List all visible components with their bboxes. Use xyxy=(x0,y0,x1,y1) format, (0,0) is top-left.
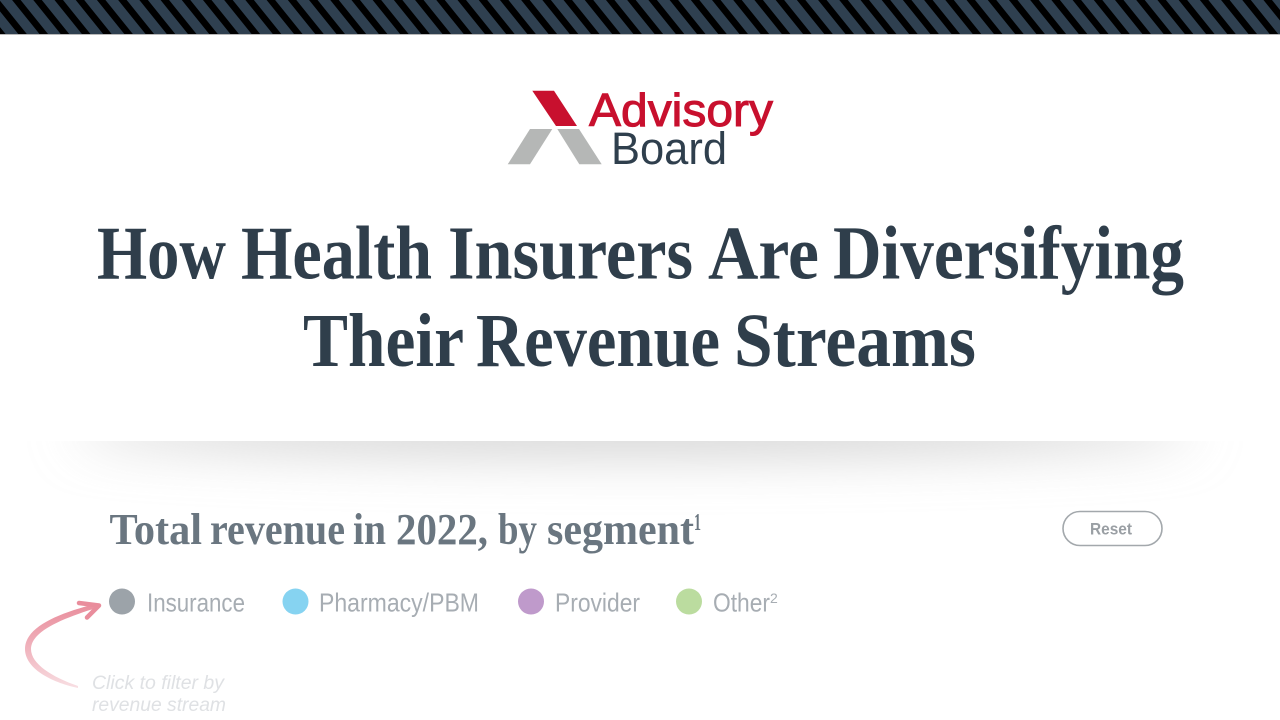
hint text: Click to filter by xyxy=(92,673,226,694)
chart heading: in xyxy=(353,505,386,554)
reset button xyxy=(1063,512,1162,546)
chart heading: revenue xyxy=(210,505,345,554)
title: How xyxy=(97,212,226,296)
title xyxy=(97,212,1184,383)
legend item: Other: 2 xyxy=(770,590,778,606)
reset button: Reset xyxy=(1090,520,1132,538)
hint text xyxy=(92,673,226,716)
legend item: Other: Other xyxy=(713,588,770,618)
title: Their xyxy=(303,299,464,383)
title: Streams xyxy=(734,299,976,383)
legend item: Provider: Provider xyxy=(555,588,640,618)
legend item: Other xyxy=(676,588,778,618)
striped top band xyxy=(0,0,1280,35)
legend item: Provider xyxy=(518,588,640,618)
title: Health xyxy=(241,212,432,296)
title: Are xyxy=(708,212,819,296)
legend xyxy=(109,588,778,618)
title: Insurers xyxy=(448,212,693,296)
section shadow xyxy=(99,441,1171,478)
chart heading: 1 xyxy=(694,510,701,536)
hint text: revenue stream xyxy=(92,695,226,716)
title: Diversifying xyxy=(833,212,1184,296)
logo wordmark: Advisory: Advisory xyxy=(589,84,773,136)
logo mark xyxy=(508,91,602,164)
chart heading: segment xyxy=(547,505,694,554)
legend item: Pharmacy/PBM: Pharmacy/PBM xyxy=(319,588,479,618)
chart heading: Total xyxy=(110,505,202,554)
logo wordmark: Board: Board xyxy=(611,123,727,174)
chart heading: by xyxy=(498,505,537,554)
chart heading xyxy=(110,505,701,554)
legend item: Insurance xyxy=(109,588,245,618)
arrow pointing to legend xyxy=(25,603,99,688)
title: Revenue xyxy=(476,299,720,383)
logo: Advisory Board xyxy=(508,84,773,174)
chart heading: 2022, xyxy=(396,505,488,554)
legend item: Insurance: Insurance xyxy=(147,588,245,618)
